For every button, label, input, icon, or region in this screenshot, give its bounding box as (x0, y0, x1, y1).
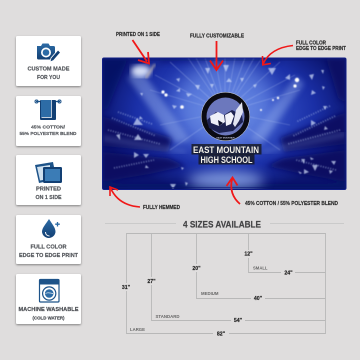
dimension numbers: 54" (234, 318, 243, 324)
panel: full color edge to edge print (16, 215, 81, 264)
callout: full color edge to edge print: EDGE TO EDGE PRINT (296, 46, 346, 52)
dimension numbers: 12" (244, 252, 253, 258)
school name: HIGH SCHOOL (200, 155, 253, 166)
text: printed on 1 side: ON 1 SIDE (36, 195, 62, 201)
panel: cotton polyester blend (16, 96, 81, 146)
text: cotton polyester blend: 45% COTTON/ (31, 124, 66, 130)
callout: fully customizable (190, 34, 245, 70)
size names: SMALL (253, 266, 268, 270)
text: printed on 1 side: PRINTED (36, 186, 61, 192)
dimension numbers: 24" (284, 270, 293, 276)
callout: fully hemmed: FULLY HEMMED (143, 205, 180, 211)
light glow (175, 60, 275, 152)
icon: towel on rail (35, 100, 61, 120)
dimension numbers: 27" (147, 279, 156, 285)
spotlight flare (131, 65, 151, 77)
dark crowd bands (102, 58, 346, 192)
callout: cotton polyester (226, 178, 338, 207)
logo badge (201, 92, 250, 141)
callout: fully customizable: FULLY CUSTOMIZABLE (190, 34, 245, 40)
dimension numbers: 40" (254, 296, 263, 302)
towel hem (104, 60, 344, 188)
callout: cotton polyester: 45% COTTON / 55% POLYESTER BLEND (245, 201, 338, 207)
towel (102, 57, 347, 192)
icon: camera with pencil (37, 44, 60, 62)
floating triangles (116, 65, 336, 189)
radiating rays (150, 58, 300, 150)
text: full color edge to edge print: FULL COLOR (30, 245, 67, 251)
dimension numbers: 31" (122, 285, 131, 291)
text: custom made for you: CUSTOM MADE (28, 66, 70, 72)
callout: full color edge to edge print (262, 40, 346, 65)
size chart (122, 234, 326, 338)
panel: machine washable (16, 274, 81, 324)
text: full color edge to edge print: EDGE TO EDGE PRINT (19, 253, 78, 259)
infographic canvas (14, 32, 346, 336)
icon: ink drop (42, 219, 60, 238)
text: machine washable: (COLD WATER) (32, 316, 65, 320)
callout: full color edge to edge print: FULL COLOR (296, 40, 326, 46)
school name (192, 144, 262, 166)
callout: fully hemmed (110, 187, 180, 211)
callout: printed on 1 side (116, 32, 161, 64)
school name: EAST MOUNTAIN (193, 145, 259, 156)
icon: washing machine (40, 280, 59, 302)
icon: photo prints (35, 162, 62, 183)
heading: 4 sizes available: 4 SIZES AVAILABLE (183, 219, 262, 230)
text: custom made for you: FOR YOU (37, 75, 60, 81)
bright stage lights (161, 78, 299, 111)
dimension numbers: 20" (192, 266, 201, 272)
size names (130, 266, 268, 332)
panel: printed on 1 side (16, 155, 81, 205)
logo ring text: EAST MOUNTAIN (216, 136, 235, 140)
dimension numbers (122, 252, 293, 338)
text: cotton polyester blend: 55% POLYESTER BLEND (20, 131, 77, 136)
size names: MEDIUM (201, 291, 219, 296)
text: machine washable: MACHINE WASHABLE (18, 307, 79, 313)
panel: custom made for you (16, 36, 81, 86)
size names: STANDARD (156, 314, 180, 319)
crowd speckle (108, 106, 340, 170)
dimension numbers: 82" (217, 332, 226, 338)
callout: printed on 1 side: PRINTED ON 1 SIDE (116, 32, 161, 38)
size names: LARGE (130, 327, 145, 332)
